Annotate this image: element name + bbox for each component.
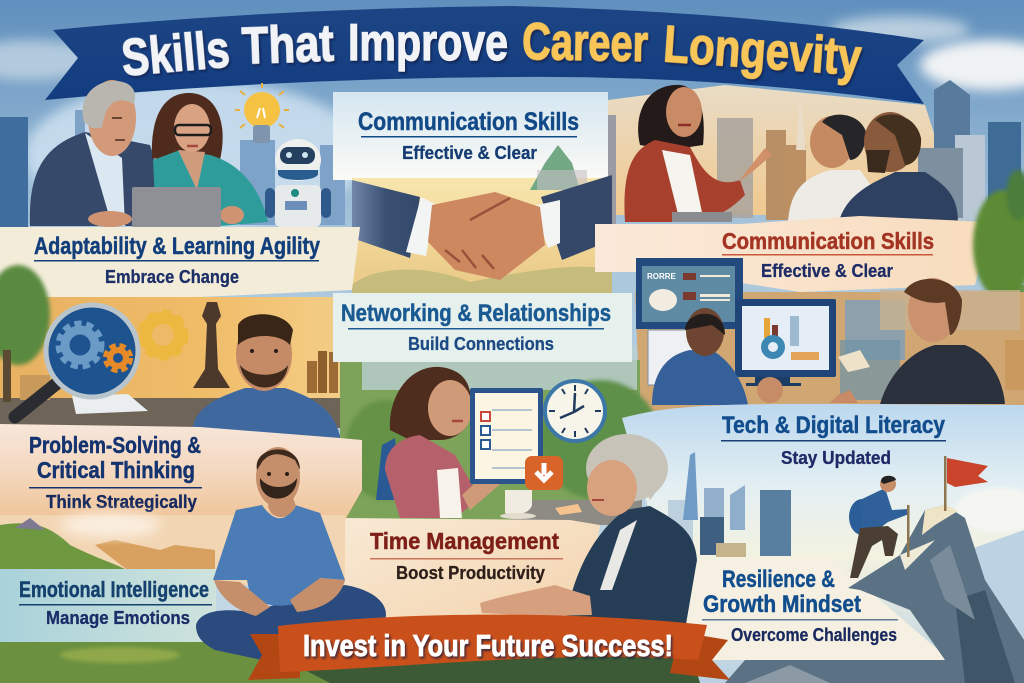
heading: Time Management <box>370 528 559 554</box>
heading: Resilience & <box>722 566 835 593</box>
bottom grass <box>0 642 330 683</box>
monitor: report screen <box>636 258 743 329</box>
icon: rising bars <box>307 342 357 393</box>
scene: right tree <box>973 170 1024 335</box>
scene backdrop: top-right city <box>608 80 1021 225</box>
title word: Skills: Skills <box>119 20 232 88</box>
woman in red blazer <box>624 85 772 222</box>
title word: That: That <box>241 14 335 76</box>
scene: seated man <box>196 447 386 660</box>
tree <box>0 265 50 402</box>
heading: Tech & Digital Literacy <box>722 412 946 439</box>
icon: coffee cup <box>500 490 582 519</box>
title word: Longevity: Longevity <box>662 15 863 87</box>
analyst right <box>830 278 1005 404</box>
panel: adaptability band <box>0 227 360 297</box>
man in dark suit <box>840 112 958 222</box>
scene: top-left team with laptop and robot <box>30 80 331 227</box>
resilience panel backdrop <box>680 556 950 660</box>
mountain <box>725 505 1024 683</box>
title word: Improve: Improve <box>348 14 508 72</box>
man with grey hair <box>30 80 160 227</box>
city skyline <box>668 452 791 557</box>
icon: magnifying glass <box>15 305 138 417</box>
man in white shirt <box>788 115 878 222</box>
panel: problem-solving and critical thinking <box>0 424 362 520</box>
panel: time management <box>345 518 600 625</box>
subheading: Overcome Challenges <box>731 625 897 645</box>
heading: Adaptability & Learning Agility <box>34 233 321 260</box>
subheading: Effective & Clear <box>402 143 537 163</box>
skyscrapers <box>918 80 1021 222</box>
ribbon tails <box>248 634 300 680</box>
flag <box>944 456 988 511</box>
subheading: Effective & Clear <box>761 261 893 281</box>
heading: Communication Skills <box>358 108 579 136</box>
monitor: analytics screen <box>735 299 836 386</box>
scene: computers and analysts <box>635 258 1024 412</box>
scene: mountain with climber <box>680 456 1024 683</box>
icon: orange download badge <box>525 456 563 490</box>
climber <box>849 476 910 578</box>
heading line one: Problem-Solving & <box>29 432 201 458</box>
chart caption: RORRE <box>647 272 677 281</box>
laptop <box>132 187 221 227</box>
subheading: Stay Updated <box>781 448 891 468</box>
panel: emotional intelligence <box>0 569 216 643</box>
panel: communication skills red band <box>595 216 990 292</box>
icon: yellow gear <box>142 314 184 356</box>
panel: communication skills top center <box>333 92 612 295</box>
icon: lightbulb <box>235 83 289 143</box>
woman with glasses <box>152 93 268 226</box>
icon: chess piece <box>193 302 230 388</box>
heading line two: Critical Thinking <box>37 457 195 483</box>
subheading: Manage Emotions <box>46 608 190 628</box>
heading: Networking & Relationships <box>341 300 611 327</box>
scene: central greenery and office <box>340 345 660 525</box>
icon: checklist clipboard <box>470 388 543 484</box>
icon: robot <box>265 139 331 227</box>
scene: landscape <box>0 513 345 585</box>
call to action: Invest in Your Future Success! <box>303 628 673 663</box>
subheading: Build Connections <box>408 334 554 354</box>
heading: Emotional Intelligence <box>19 577 209 602</box>
heading line two: Growth Mindset <box>703 591 861 618</box>
paper <box>72 394 148 414</box>
panel: tech and digital literacy / resilience sky <box>622 404 1024 683</box>
man with beard <box>193 314 341 440</box>
icon: handshake <box>352 175 612 280</box>
scene: left problem-solving <box>0 265 362 440</box>
scene: top-right presentation <box>624 85 958 222</box>
title word: Career: Career <box>522 13 649 73</box>
subheading: Think Strategically <box>46 492 197 512</box>
subheading: Boost Productivity <box>396 563 545 583</box>
footer banner <box>248 615 730 680</box>
panel: networking and relationships <box>333 293 632 362</box>
scene: woman at checklist <box>376 367 505 518</box>
title banner <box>45 6 924 104</box>
analyst left <box>652 308 783 405</box>
icon: wall clock <box>545 381 605 441</box>
heading: Communication Skills <box>722 228 934 254</box>
scene: older woman <box>480 434 697 630</box>
subheading: Embrace Change <box>105 267 239 287</box>
